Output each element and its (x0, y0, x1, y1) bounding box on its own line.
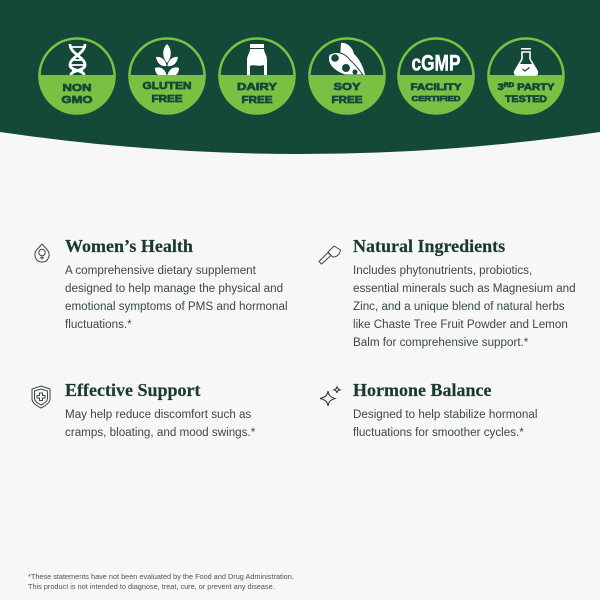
footnote disclaimer: This product is not intended to diagnose, treat, cure, or prevent any disease. (28, 582, 275, 590)
icon: natural ingredients mortar tool (318, 245, 341, 265)
badge: cGMP facility certified: FACILITY (410, 82, 462, 92)
body copy: designed to help manage the physical and (65, 282, 283, 295)
body copy: essential minerals such as Magnesium and (353, 282, 576, 295)
body copy (353, 264, 576, 349)
icon: shield with cross (32, 386, 50, 408)
body copy: May help reduce discomfort such as (65, 408, 251, 421)
footnote disclaimer: *These statements have not been evaluated by the Food and Drug Administration. (28, 572, 294, 581)
badge: non GMO: GMO (62, 94, 92, 106)
heading: Women’s Health (65, 236, 193, 256)
certification badges row (38, 37, 565, 115)
body copy (65, 264, 288, 331)
badge: gluten free: GLUTEN (142, 81, 192, 92)
badge: non GMO (40, 38, 114, 114)
footnote disclaimer (28, 572, 294, 590)
badge: non GMO: NON (62, 82, 92, 94)
badge: third party tested: TESTED (505, 94, 547, 105)
heading: Effective Support (65, 380, 200, 400)
badge: third party tested: PARTY (514, 82, 555, 93)
body copy: Designed to help stabilize hormonal (353, 408, 537, 421)
badge: third party tested (488, 38, 564, 114)
badge: third party tested: RD (504, 83, 515, 89)
body copy: Includes phytonutrients, probiotics, (353, 264, 532, 277)
badge: cGMP facility certified (398, 38, 474, 114)
badge: dairy free: DAIRY (237, 82, 277, 93)
body copy (353, 408, 537, 439)
text block: Effective Support (65, 380, 256, 439)
icon: soybean pod (328, 43, 365, 75)
badge: cGMP facility certified: CERTIFIED (412, 94, 461, 103)
icon: wheat (155, 44, 179, 76)
text block: Hormone Balance (353, 380, 537, 439)
body copy: Balm for comprehensive support.* (353, 336, 528, 349)
icon: lab flask (515, 48, 537, 75)
body copy: like Chaste Tree Fruit Powder and Lemon (353, 318, 568, 331)
badge: gluten free (130, 38, 204, 114)
text block: Natural Ingredients (353, 236, 576, 349)
heading: Natural Ingredients (353, 236, 505, 256)
body copy (65, 408, 256, 439)
cGMP wordmark: cGMP (412, 50, 460, 76)
body copy: Zinc, and a unique blend of natural herbs (353, 300, 565, 313)
badge: soy free (310, 38, 385, 114)
text block: Women's Health (65, 236, 288, 331)
badge: gluten free: FREE (152, 94, 183, 105)
body copy: emotional symptoms of PMS and hormonal (65, 300, 288, 313)
heading: Hormone Balance (353, 380, 491, 400)
body copy: A comprehensive dietary supplement (65, 264, 256, 277)
badge: soy free: FREE (332, 95, 363, 106)
body copy: fluctuations.* (65, 318, 132, 331)
icon: women's health drop (34, 243, 50, 262)
badge: soy free: SOY (334, 82, 361, 93)
header band with curved bottom (0, 0, 600, 154)
badge: dairy free (220, 38, 294, 114)
body copy: cramps, bloating, and mood swings.* (65, 426, 255, 439)
icon: sparkles (320, 386, 342, 406)
badge: dairy free: FREE (242, 95, 273, 106)
body copy: fluctuations for smoother cycles.* (353, 426, 524, 439)
icon: DNA helix (70, 44, 85, 75)
badge: third party tested: 3 (498, 82, 503, 93)
icon: milk bottle (247, 44, 267, 75)
